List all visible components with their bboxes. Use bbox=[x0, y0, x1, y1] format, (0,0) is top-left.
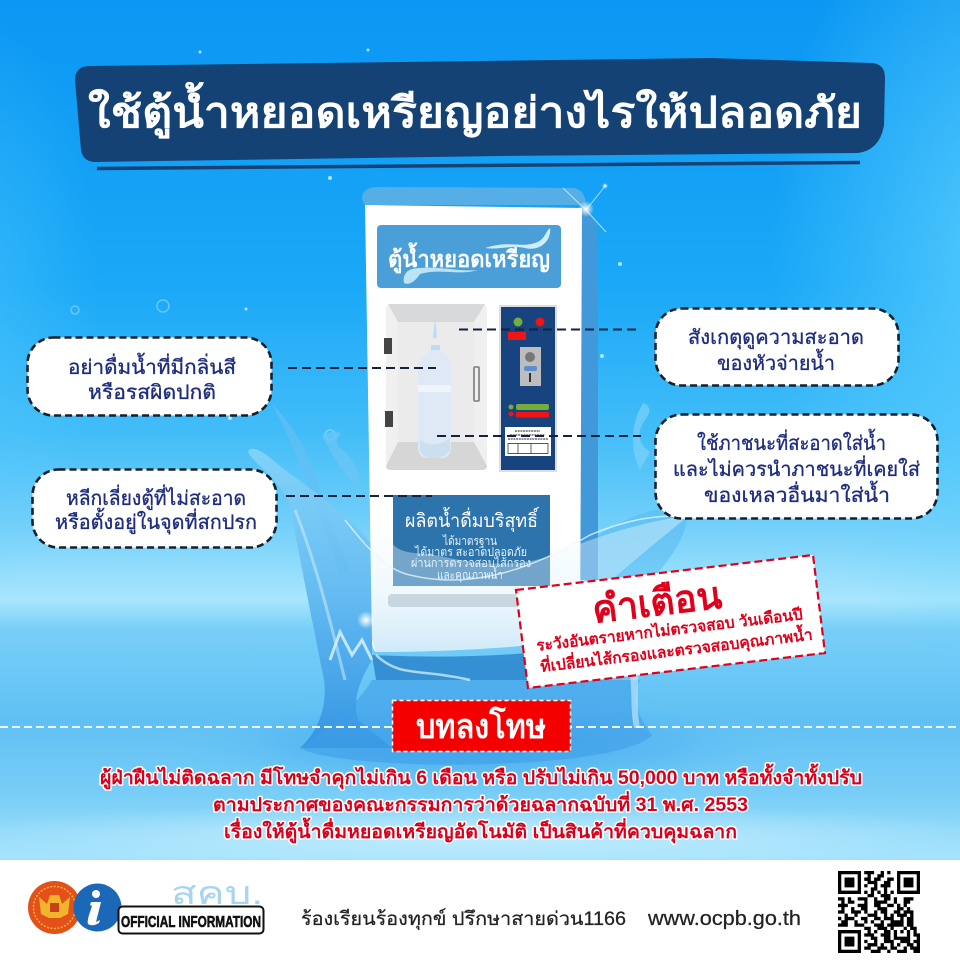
dashed leader lines bbox=[286, 330, 641, 496]
QR code bbox=[838, 871, 920, 953]
penalty text: ผู้ฝ่าฝืนไม่ติดฉลาก มีโทษจำคุกไม่เกิน 6 เดือน หรือ ปรับไม่เกิน 50,000 บาท หรือทั้งจำทั้งปรับ bbox=[100, 763, 862, 790]
machine sign bbox=[377, 225, 561, 288]
machine front bbox=[365, 205, 582, 652]
logo: government seal bbox=[28, 881, 81, 934]
section divider bbox=[0, 726, 960, 728]
footer bbox=[0, 860, 960, 960]
warning note: ระวังอันตรายหากไม่ตรวจสอบ วันเดือนปี bbox=[535, 604, 804, 655]
callout: clean containers: ของเหลวอื่นมาใส่น้ำ bbox=[704, 481, 890, 507]
callout: check nozzle: ของหัวจ่ายน้ำ bbox=[717, 349, 835, 375]
machine sign: ตู้น้ำหยอดเหรียญ bbox=[388, 242, 550, 274]
callout: clean containers: และไม่ควรนำภาชนะที่เคยใส่ bbox=[673, 455, 920, 481]
dispensing tray bbox=[388, 594, 528, 607]
water splash back bbox=[248, 403, 688, 765]
logo: official information stamp: OFFICIAL INFORMATION bbox=[121, 914, 261, 931]
water splash front bbox=[345, 516, 688, 680]
logo: official information stamp: สคบ. bbox=[171, 875, 263, 911]
control panel bbox=[499, 305, 557, 472]
callout: clean containers: ใช้ภาชนะที่สะอาดใส่น้ำ bbox=[697, 429, 886, 455]
product panel: ได้มาตร สะอาดปลอดภัย bbox=[414, 545, 527, 559]
vending machine bbox=[362, 187, 598, 680]
callout: check nozzle bbox=[656, 308, 898, 386]
sparkle bbox=[563, 183, 608, 232]
penalty text bbox=[100, 763, 862, 844]
hotline text: ร้องเรียนร้องทุกข์ ปรึกษาสายด่วน1166 bbox=[301, 908, 626, 931]
bottle bbox=[418, 317, 451, 458]
product panel: ผลิตน้ำดื่มบริสุทธิ์ bbox=[405, 506, 540, 533]
penalty text: ตามประกาศของคณะกรรมการว่าด้วยฉลากฉบับที่ 31 พ.ศ. 2553 bbox=[213, 791, 748, 816]
penalty heading bbox=[392, 700, 570, 752]
callout: no strange smell: อย่าดื่มน้ำที่มีกลิ่นสี bbox=[68, 353, 236, 379]
callout: avoid dirty machines: หรือตั้งอยู่ในจุดที่สกปรก bbox=[55, 508, 257, 535]
callout: avoid dirty machines: หลีกเลี่ยงตู้ที่ไม่สะอาด bbox=[66, 484, 246, 511]
underline bbox=[97, 162, 860, 168]
machine side panel bbox=[578, 205, 598, 580]
machine top cap bbox=[362, 187, 586, 205]
product panel: ได้มาตรฐาน bbox=[442, 534, 497, 548]
callout: no strange smell bbox=[28, 338, 272, 416]
title banner bbox=[75, 58, 885, 168]
product panel: และคุณภาพน้ำ bbox=[437, 566, 503, 583]
banner shape bbox=[75, 58, 885, 162]
logo: information icon bbox=[74, 884, 122, 932]
callout: avoid dirty machines bbox=[32, 470, 276, 548]
logo: official information stamp bbox=[118, 875, 264, 934]
warning note: คำเตือน bbox=[590, 575, 724, 632]
website: www.ocpb.go.th bbox=[647, 908, 801, 930]
product panel: ผ่านการตรวจสอบไส้กรอง bbox=[411, 556, 531, 570]
machine base bbox=[372, 650, 560, 680]
penalty heading: บทลงโทษ bbox=[416, 706, 546, 746]
warning note bbox=[516, 555, 825, 688]
callout: no strange smell: หรือรสผิดปกติ bbox=[88, 382, 216, 404]
warning note: ที่เปลี่ยนไส้กรองและตรวจสอบคุณภาพน้ำ bbox=[539, 623, 814, 677]
callout: check nozzle: สังเกตุดูความสะอาด bbox=[688, 327, 864, 350]
callout: clean containers bbox=[656, 414, 938, 518]
dispensing window bbox=[384, 304, 487, 470]
product panel bbox=[393, 495, 550, 586]
title text: ใช้ตู้น้ำหยอดเหรียญอย่างไรให้ปลอดภัย bbox=[88, 81, 862, 139]
penalty text: เรื่องให้ตู้น้ำดื่มหยอดเหรียญอัตโนมัติ เป็นสินค้าที่ควบคุมฉลาก bbox=[224, 817, 737, 844]
